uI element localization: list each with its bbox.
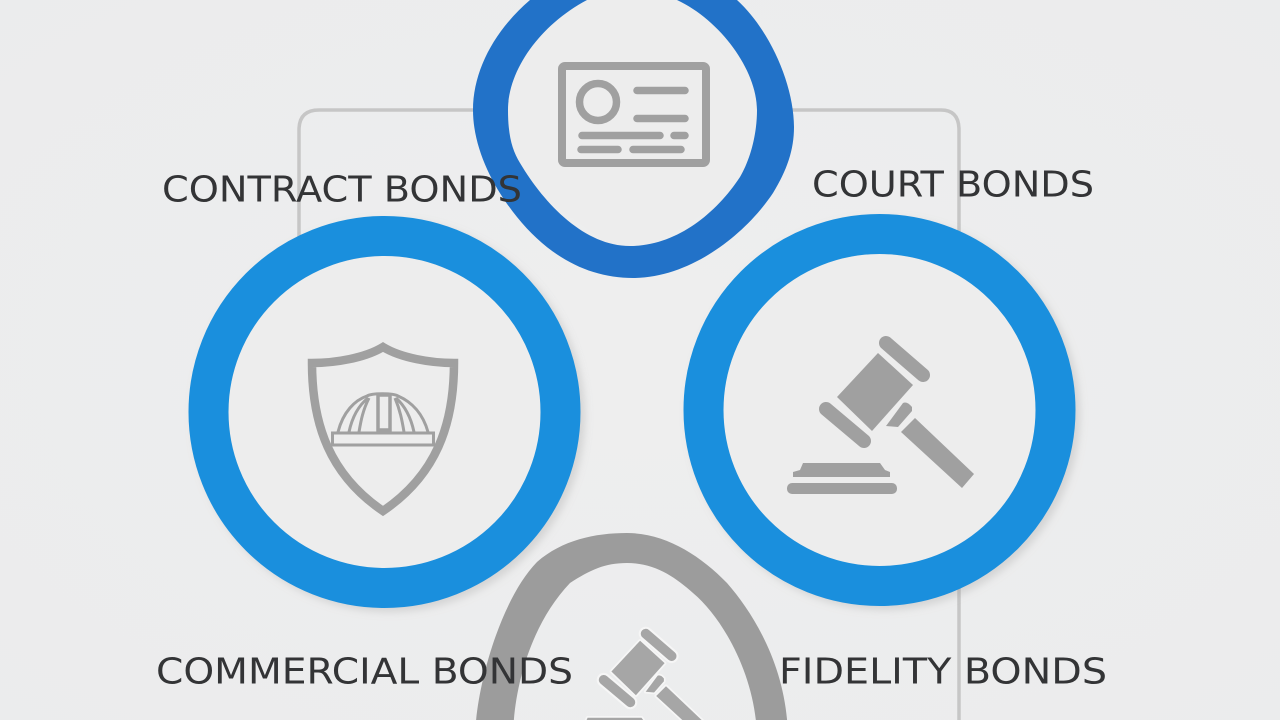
- ring: bottom (commercial/fidelity): [475, 533, 788, 720]
- connector frame: [299, 110, 959, 720]
- label: contract bonds: CONTRACT BONDS: [162, 170, 522, 210]
- icon: shield with hard hat: [312, 347, 454, 511]
- label: commercial bonds: COMMERCIAL BONDS: [156, 652, 573, 692]
- icon: gavel with halo: [581, 634, 707, 720]
- ring: court bonds: [704, 234, 1060, 590]
- label: fidelity bonds: FIDELITY BONDS: [779, 652, 1107, 692]
- ring: contract bonds: [208, 236, 565, 592]
- icon: gavel: [787, 343, 974, 494]
- label: court bonds: COURT BONDS: [812, 164, 1094, 206]
- ring: top (license): [473, 0, 794, 278]
- icon: license card: [562, 66, 706, 163]
